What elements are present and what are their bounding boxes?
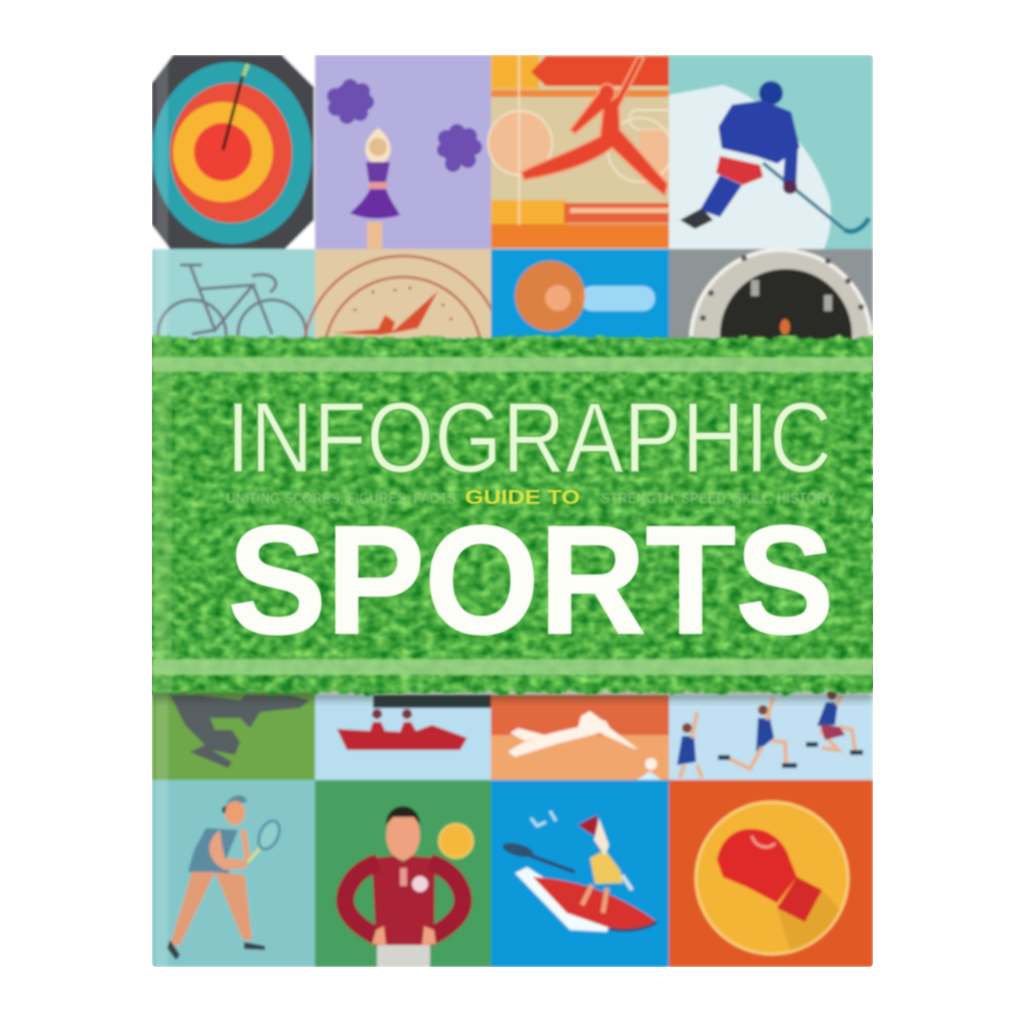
panel: tennis — [152, 780, 315, 967]
panel: cycling — [152, 249, 315, 368]
panel: horse racing — [152, 690, 315, 780]
panel: sports coach — [315, 780, 491, 967]
icon: jumping athlete — [521, 56, 668, 196]
field stripe: top — [152, 357, 873, 372]
panel: archery target — [152, 55, 315, 249]
title: INFOGRAPHIC: INFOGRAPHIC — [226, 382, 832, 494]
book cover illustration — [152, 55, 873, 967]
icon: hockey stick — [763, 163, 845, 230]
panel: ice hockey player — [669, 55, 873, 249]
grass shadow — [152, 688, 873, 700]
cover art — [150, 55, 874, 967]
panel: grass band — [150, 337, 874, 693]
subtitle: left: UNITING SCORES, FIGURES, FACTS — [226, 490, 456, 507]
icon: arrow — [223, 70, 244, 150]
panel: speeding ball — [491, 249, 671, 339]
panel: kayaking — [491, 780, 669, 967]
title: SPORTS: SPORTS — [228, 494, 834, 666]
subtitle: right: STRENGTH, SPEED, SKILL, HISTORY — [601, 490, 835, 507]
panel: boxing glove — [669, 780, 873, 967]
spine stripe — [154, 338, 172, 692]
spine highlight — [156, 55, 168, 967]
panel: rowing — [315, 695, 491, 780]
panel: swimming — [491, 695, 669, 780]
panel: speedometer — [669, 249, 873, 430]
field stripe: bottom — [152, 659, 873, 675]
panel: stopwatch athlete — [302, 248, 502, 340]
panel: basketball jump — [488, 55, 672, 249]
subtitle: guide to: GUIDE TO — [465, 487, 580, 509]
panel: long jump sequence — [669, 690, 873, 780]
panel: cheerleader — [315, 55, 491, 249]
